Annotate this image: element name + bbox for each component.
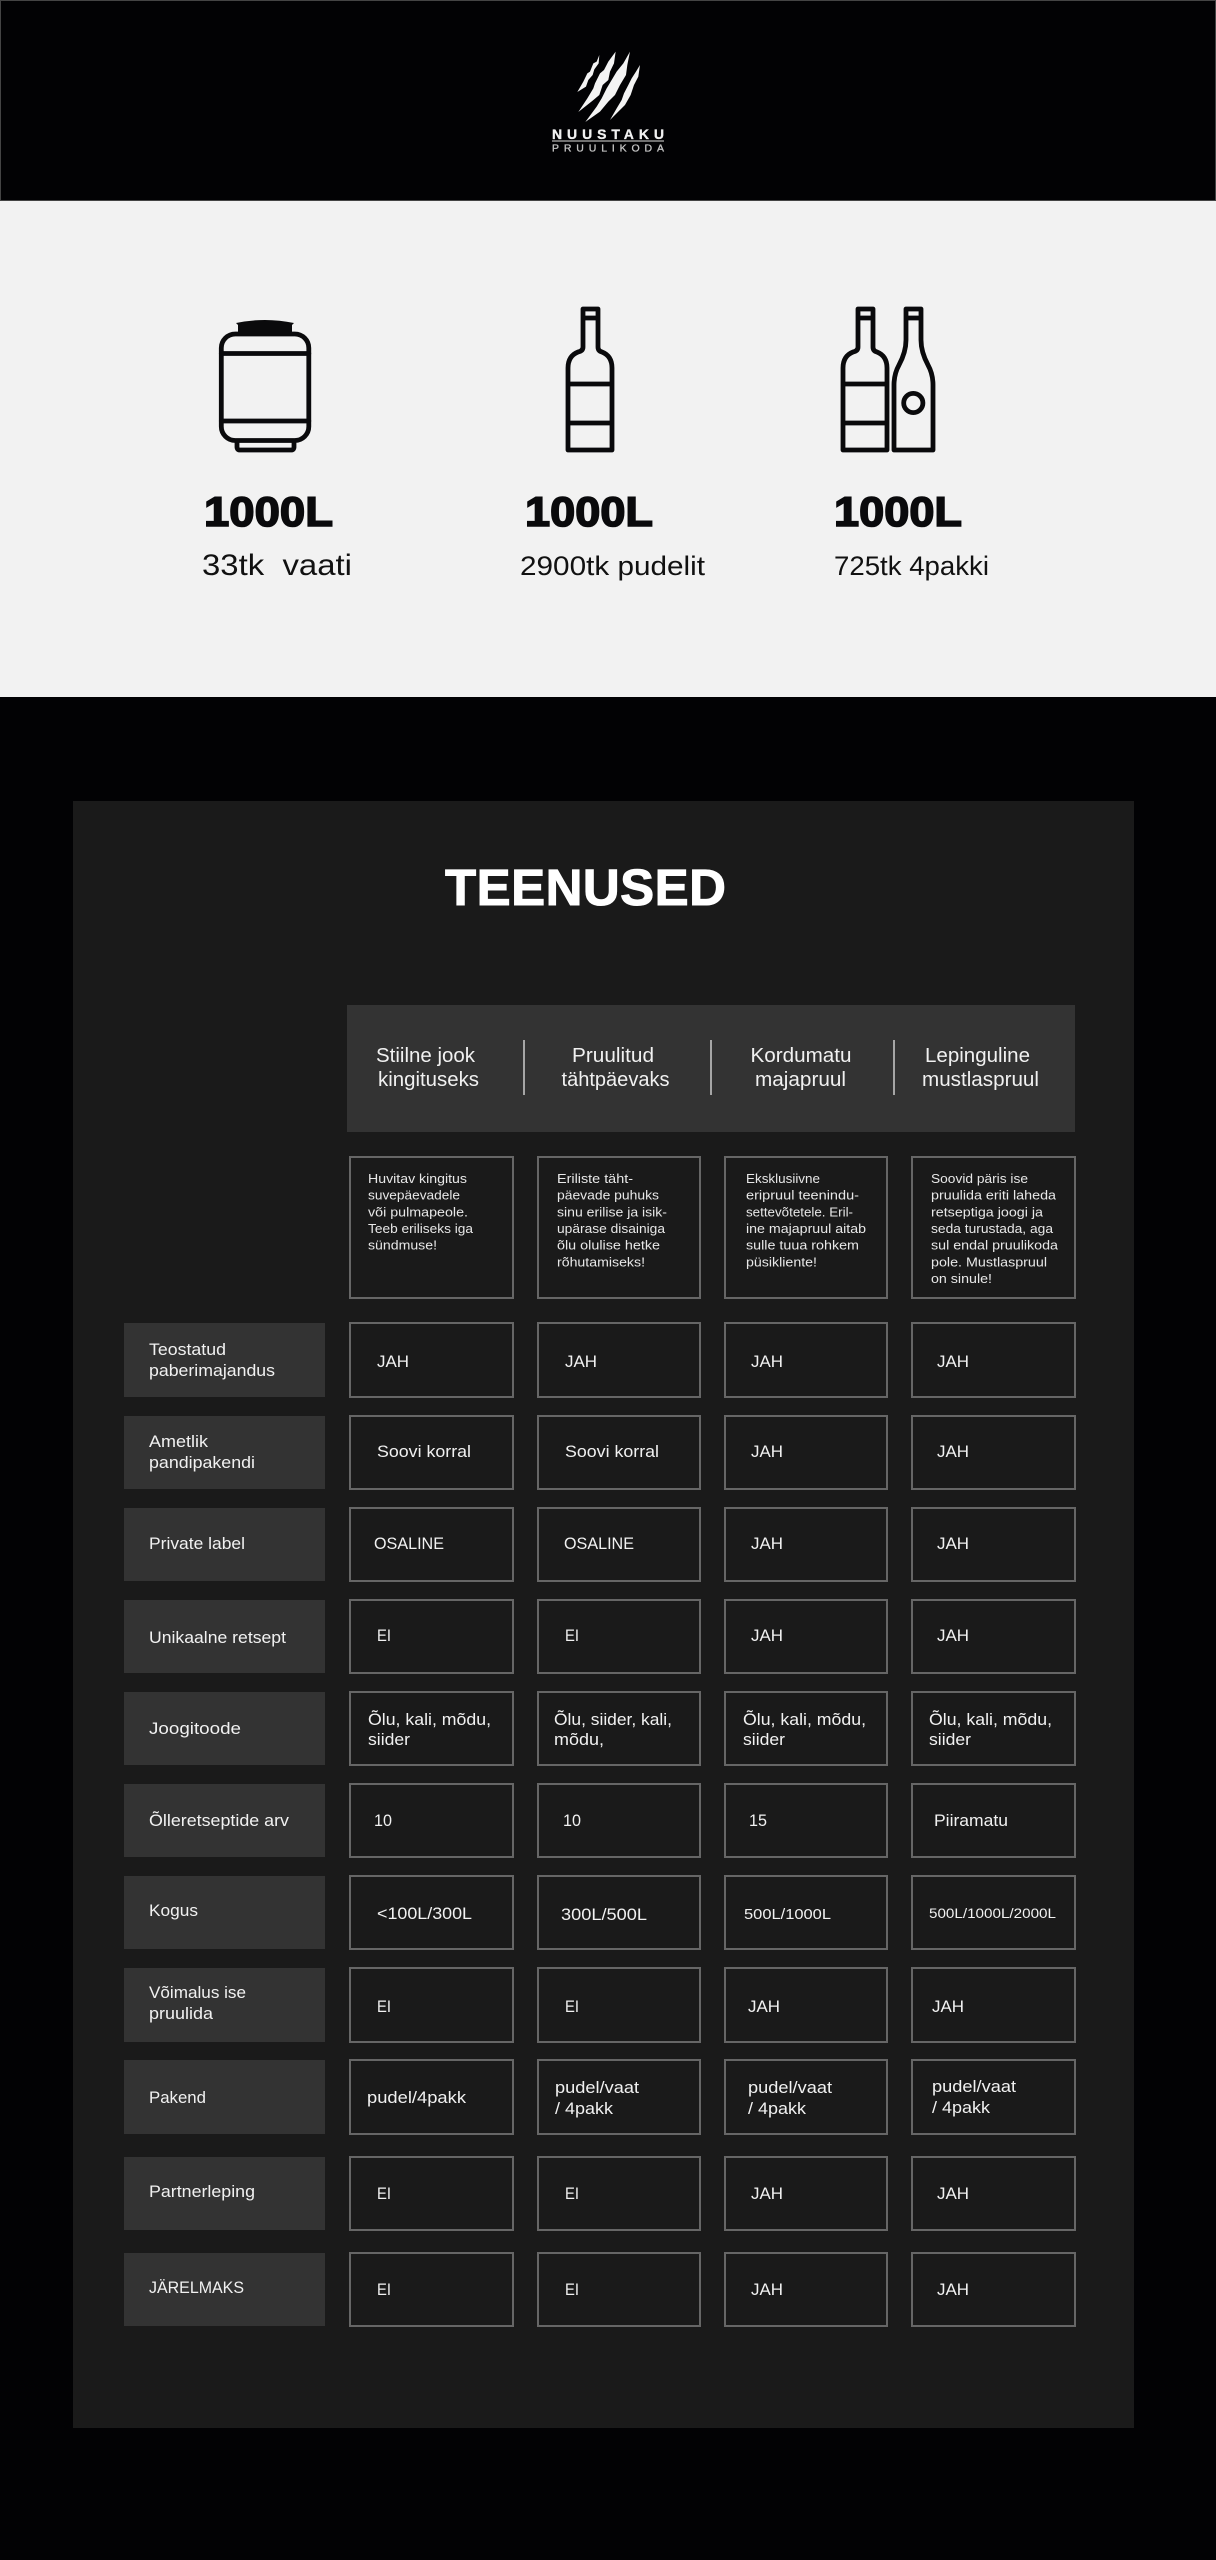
row: Pakend: pudel/vaat bbox=[555, 2078, 639, 2097]
row: Teostatud paberimajandus: JAH bbox=[751, 1352, 783, 1371]
description: Lepinguline bbox=[912, 1157, 1075, 1298]
description: Stiilne jook: Teeb eriliseks iga bbox=[368, 1221, 474, 1236]
row: Ametlik pandipakendi: Soovi korral bbox=[565, 1442, 659, 1461]
row: Ametlik pandipakendi bbox=[124, 1416, 1075, 1489]
row: Pakend bbox=[124, 2060, 1075, 2134]
row: JÄRELMAKS: JAH bbox=[937, 2280, 969, 2299]
service header band bbox=[347, 1005, 1075, 1132]
row: Partnerleping: EI bbox=[565, 2184, 579, 2203]
row: Õlleretseptide arv: Õlleretseptide arv bbox=[149, 1811, 290, 1830]
description: Lepinguline: seda turustada, aga bbox=[931, 1221, 1054, 1236]
description: Pruulitud bbox=[538, 1157, 700, 1298]
row: Ametlik pandipakendi: pandipakendi bbox=[149, 1453, 255, 1472]
row: Võimalus ise pruulida: EI bbox=[565, 1997, 579, 2016]
row: Teostatud paberimajandus: JAH bbox=[565, 1352, 597, 1371]
row: Võimalus ise pruulida: JAH bbox=[932, 1997, 964, 2016]
row: Õlleretseptide arv bbox=[124, 1784, 1075, 1857]
icon: bottle and wine bottle bbox=[843, 309, 933, 450]
row: JÄRELMAKS: EI bbox=[377, 2280, 391, 2299]
description: Kordumatu: settevõtetele. Eril- bbox=[746, 1204, 853, 1219]
description: Kordumatu: ine majapruul aitab bbox=[746, 1221, 866, 1236]
row: Joogitoode: siider bbox=[368, 1730, 410, 1749]
row: Private label bbox=[124, 1508, 1075, 1581]
description: Lepinguline: on sinule! bbox=[931, 1271, 992, 1286]
row: Private label: JAH bbox=[751, 1534, 783, 1553]
row: Pakend: Pakend bbox=[149, 2088, 206, 2107]
description: Pruulitud: rõhutamiseks! bbox=[557, 1254, 645, 1269]
description: Lepinguline: Soovid päris ise bbox=[931, 1171, 1028, 1186]
description: Kordumatu: püsikliente! bbox=[746, 1254, 817, 1269]
row: JÄRELMAKS bbox=[124, 2253, 1075, 2326]
description: Kordumatu: eripruul teenindu- bbox=[746, 1188, 859, 1203]
row: Joogitoode: siider bbox=[743, 1730, 785, 1749]
logo: claw marks bbox=[577, 52, 640, 122]
service header band: kingituseks bbox=[378, 1069, 479, 1091]
row: JÄRELMAKS: EI bbox=[565, 2280, 579, 2299]
row: Võimalus ise pruulida: Võimalus ise bbox=[149, 1983, 246, 2002]
row: Pakend: / 4pakk bbox=[932, 2098, 991, 2117]
description: Lepinguline: pole. Mustlaspruul bbox=[931, 1254, 1047, 1269]
row: Kogus: <100L/300L bbox=[377, 1904, 472, 1923]
stat: bottles: 2900tk pudelit bbox=[520, 551, 706, 581]
row: Võimalus ise pruulida bbox=[124, 1968, 1075, 2042]
row: Partnerleping: JAH bbox=[751, 2184, 783, 2203]
row: Joogitoode: Õlu, kali, mõdu, bbox=[929, 1710, 1052, 1729]
row: Õlleretseptide arv: 15 bbox=[749, 1811, 767, 1830]
stat: bottles: 1000L bbox=[525, 488, 653, 535]
row: Pakend: / 4pakk bbox=[748, 2099, 807, 2118]
icon: keg bbox=[221, 320, 309, 450]
row: Ametlik pandipakendi: JAH bbox=[751, 1442, 783, 1461]
row: Unikaalne retsept: EI bbox=[565, 1626, 579, 1645]
row: Kogus: Kogus bbox=[149, 1901, 198, 1920]
row: Teostatud paberimajandus: paberimajandus bbox=[149, 1361, 275, 1380]
row: Võimalus ise pruulida: EI bbox=[377, 1997, 391, 2016]
row: Private label: OSALINE bbox=[564, 1534, 634, 1553]
description: Pruulitud: Eriliste täht- bbox=[557, 1171, 633, 1186]
row: Joogitoode: Õlu, kali, mõdu, bbox=[743, 1710, 866, 1729]
description: Pruulitud: upärase disainiga bbox=[557, 1221, 666, 1236]
service header band: tähtpäevaks bbox=[562, 1069, 670, 1091]
row: Unikaalne retsept: JAH bbox=[751, 1626, 783, 1645]
row: Pakend: pudel/vaat bbox=[748, 2078, 832, 2097]
row: Teostatud paberimajandus: JAH bbox=[377, 1352, 409, 1371]
service header band: Lepinguline bbox=[925, 1045, 1030, 1067]
row: Kogus: 500L/1000L bbox=[744, 1906, 831, 1923]
description: Pruulitud: sinu erilise ja isik- bbox=[557, 1204, 667, 1219]
row: Teostatud paberimajandus: Teostatud bbox=[149, 1340, 226, 1359]
stat: four-packs: 1000L bbox=[834, 488, 962, 535]
panel: services table bbox=[73, 801, 1134, 2428]
row: Pakend: pudel/vaat bbox=[932, 2077, 1016, 2096]
row: Võimalus ise pruulida: pruulida bbox=[149, 2004, 214, 2023]
stat: bottles bbox=[520, 488, 706, 581]
row: Pakend: / 4pakk bbox=[555, 2099, 614, 2118]
row: Unikaalne retsept: EI bbox=[377, 1626, 391, 1645]
row: Joogitoode: Õlu, siider, kali, bbox=[554, 1710, 672, 1729]
row: Private label: JAH bbox=[937, 1534, 969, 1553]
row: Kogus bbox=[124, 1876, 1075, 1949]
row: Joogitoode: Õlu, kali, mõdu, bbox=[368, 1710, 491, 1729]
row: Ametlik pandipakendi: JAH bbox=[937, 1442, 969, 1461]
row: Partnerleping bbox=[124, 2157, 1075, 2230]
description: Lepinguline: sul endal pruulikoda bbox=[931, 1238, 1059, 1253]
header band with logo bbox=[0, 0, 1216, 200]
description: Stiilne jook: või pulmapeole. bbox=[368, 1204, 468, 1219]
panel: capacity stats bbox=[0, 201, 1216, 697]
heading: TEENUSED bbox=[445, 859, 726, 916]
logo: wordmark bbox=[552, 126, 664, 154]
stat: kegs: 1000L bbox=[204, 488, 333, 535]
service header band: Stiilne jook bbox=[376, 1045, 476, 1067]
logo: wordmark: NUUSTAKU bbox=[552, 126, 664, 142]
row: Õlleretseptide arv: 10 bbox=[563, 1811, 581, 1830]
description: Kordumatu: Eksklusiivne bbox=[746, 1171, 820, 1186]
icon: bottle bbox=[568, 309, 612, 450]
row: Ametlik pandipakendi: Ametlik bbox=[149, 1432, 209, 1451]
description: Lepinguline: retseptiga joogi ja bbox=[931, 1204, 1044, 1219]
service header band: Kordumatu bbox=[750, 1045, 852, 1067]
row: Unikaalne retsept: JAH bbox=[937, 1626, 969, 1645]
stat: kegs bbox=[202, 488, 352, 582]
service header band: Pruulitud bbox=[572, 1045, 654, 1067]
description: Pruulitud: õlu olulise hetke bbox=[557, 1238, 660, 1253]
description: Stiilne jook bbox=[350, 1157, 513, 1298]
row: Joogitoode: Joogitoode bbox=[149, 1719, 241, 1738]
row: Teostatud paberimajandus bbox=[124, 1323, 1075, 1397]
row: Õlleretseptide arv: Piiramatu bbox=[934, 1811, 1008, 1830]
row: Unikaalne retsept: Unikaalne retsept bbox=[149, 1628, 286, 1647]
description: Lepinguline: pruulida eriti laheda bbox=[931, 1188, 1057, 1203]
row: Õlleretseptide arv: 10 bbox=[374, 1811, 392, 1830]
row: Pakend: pudel/4pakk bbox=[367, 2088, 467, 2107]
description: Stiilne jook: Huvitav kingitus bbox=[368, 1171, 468, 1186]
row: Joogitoode: siider bbox=[929, 1730, 971, 1749]
row: Private label: OSALINE bbox=[374, 1534, 444, 1553]
stat: four-packs: 725tk 4pakki bbox=[834, 551, 989, 581]
logo: wordmark: PRUULIKODA bbox=[552, 142, 664, 154]
description: Kordumatu bbox=[725, 1157, 887, 1298]
row: Kogus: 300L/500L bbox=[561, 1905, 647, 1924]
row: Partnerleping: EI bbox=[377, 2184, 391, 2203]
description: Kordumatu: sulle tuua rohkem bbox=[746, 1238, 859, 1253]
row: Partnerleping: Partnerleping bbox=[149, 2182, 255, 2201]
description: Stiilne jook: sündmuse! bbox=[368, 1238, 437, 1253]
description: Pruulitud: päevade puhuks bbox=[557, 1188, 660, 1203]
stat: four-packs bbox=[834, 488, 989, 581]
row: JÄRELMAKS: JAH bbox=[751, 2280, 783, 2299]
row: Kogus: 500L/1000L/2000L bbox=[929, 1905, 1056, 1921]
row: Joogitoode bbox=[124, 1692, 1075, 1765]
row: Võimalus ise pruulida: JAH bbox=[748, 1997, 780, 2016]
row: Joogitoode: mõdu, bbox=[554, 1730, 604, 1749]
row: Private label: Private label bbox=[149, 1534, 245, 1553]
row: Partnerleping: JAH bbox=[937, 2184, 969, 2203]
row: JÄRELMAKS: JÄRELMAKS bbox=[149, 2278, 244, 2297]
description: Stiilne jook: suvepäevadele bbox=[368, 1188, 460, 1203]
row: Unikaalne retsept bbox=[124, 1600, 1075, 1673]
service header band: mustlaspruul bbox=[922, 1069, 1039, 1091]
row: Ametlik pandipakendi: Soovi korral bbox=[377, 1442, 471, 1461]
row: Teostatud paberimajandus: JAH bbox=[937, 1352, 969, 1371]
service header band: majapruul bbox=[755, 1069, 846, 1091]
stat: kegs: 33tk vaati bbox=[202, 549, 352, 582]
